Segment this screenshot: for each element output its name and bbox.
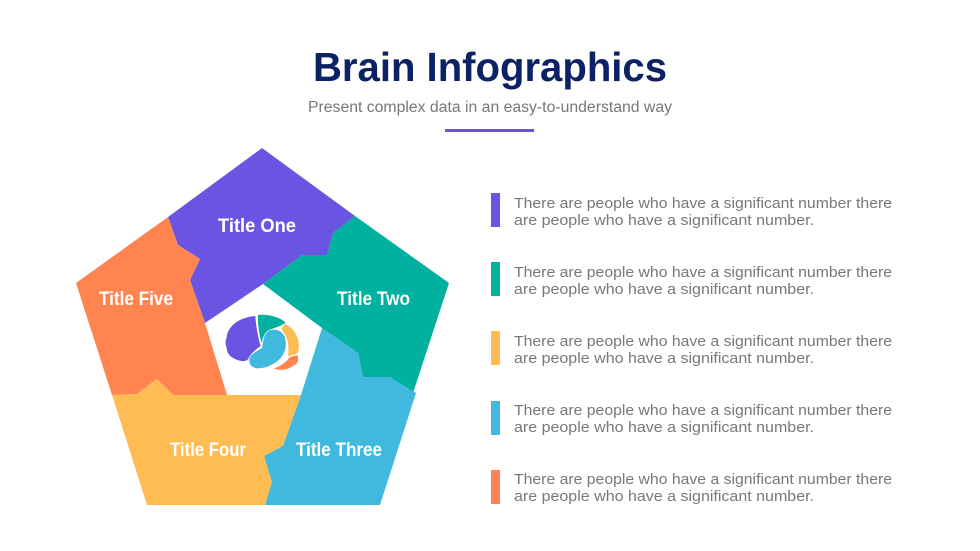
list item 5 bbox=[491, 470, 892, 505]
segment: title five: Title Five bbox=[99, 289, 173, 310]
subtitle: Present complex data in an easy-to-understand way bbox=[308, 99, 672, 116]
color bar bbox=[491, 262, 500, 296]
list item 3 bbox=[491, 331, 892, 367]
list item 1 bbox=[491, 193, 892, 229]
color bar bbox=[491, 401, 500, 435]
segment: title two: Title Two bbox=[337, 289, 410, 310]
segment: title three: Title Three bbox=[296, 440, 382, 461]
description text: There are people who have a significant number there bbox=[514, 471, 892, 488]
icon: brain bbox=[226, 315, 299, 370]
description text: are people who have a significant number. bbox=[514, 488, 814, 505]
description text bbox=[514, 333, 892, 367]
description text: are people who have a significant number. bbox=[514, 350, 814, 367]
segment: title one: Title One bbox=[218, 216, 296, 237]
description text: are people who have a significant number. bbox=[514, 281, 814, 298]
segment: title one bbox=[168, 148, 355, 323]
title underline bbox=[445, 129, 534, 132]
segment: title five bbox=[76, 217, 227, 395]
list item 2 bbox=[491, 262, 892, 298]
description text bbox=[514, 264, 892, 298]
segment: title four: Title Four bbox=[170, 440, 247, 461]
description text bbox=[514, 471, 892, 505]
color bar bbox=[491, 331, 500, 365]
description text: There are people who have a significant number there bbox=[514, 195, 892, 212]
segment: title three bbox=[264, 328, 416, 505]
description text bbox=[514, 195, 892, 229]
description text: There are people who have a significant number there bbox=[514, 333, 892, 350]
description text: There are people who have a significant number there bbox=[514, 264, 892, 281]
description text: are people who have a significant number. bbox=[514, 419, 814, 436]
color bar bbox=[491, 193, 500, 227]
color bar bbox=[491, 470, 500, 504]
segment: title four bbox=[112, 379, 301, 505]
segment: title two bbox=[263, 216, 449, 393]
pentagon diagram bbox=[76, 148, 449, 505]
description text bbox=[514, 402, 892, 436]
description text: are people who have a significant number. bbox=[514, 212, 814, 229]
list item 4 bbox=[491, 401, 892, 436]
description text: There are people who have a significant number there bbox=[514, 402, 892, 419]
title: Brain Infographics bbox=[313, 44, 667, 90]
